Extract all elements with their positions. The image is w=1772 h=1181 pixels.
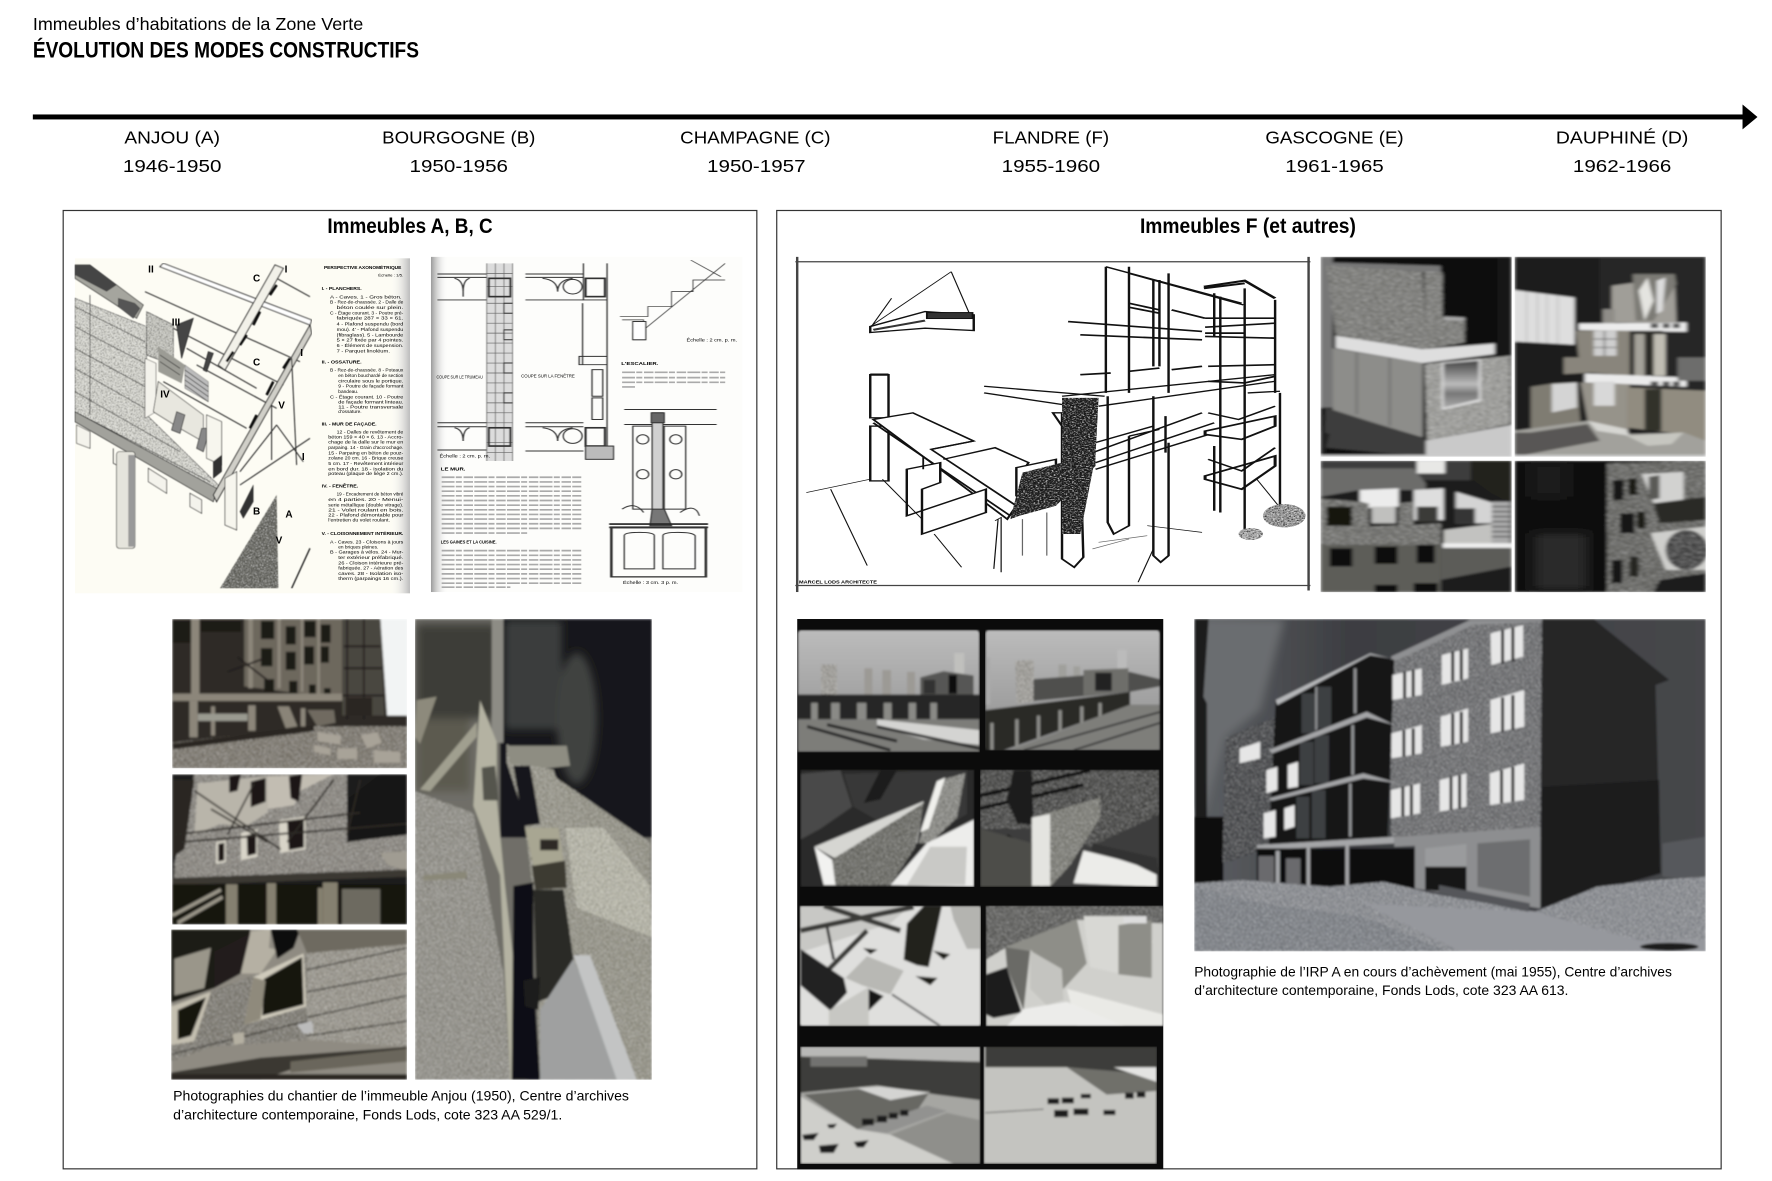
caption: IRP A: d’architecture contemporaine, Fonds Lods, cote 323 AA 613. — [1194, 982, 1568, 998]
timeline labels: DAUPHINÉ (D) — [1556, 127, 1688, 147]
plate: perspective axonométrique: 11 - Poutre transversale — [338, 404, 404, 409]
plate: coupes et détails: LE MUR. — [441, 467, 466, 472]
plate: perspective axonométrique: de façade formant linteau. — [338, 400, 403, 405]
frame 5 — [800, 906, 981, 1026]
photo: maquette, angle — [1320, 256, 1512, 457]
plate: perspective axonométrique: B - Rez-de-chaussée. 8 - Poteaux — [330, 368, 404, 373]
plate: coupes et détails: COUPE SUR LA FENÊTRE — [521, 372, 575, 379]
caption: chantier Anjou: d’architecture contemporaine, Fonds Lods, cote 323 AA 529/1. — [173, 1107, 562, 1123]
plate: perspective axonométrique: fabriquée 287 × 33 × 61. — [337, 316, 403, 321]
plate: perspective axonométrique: III. - MUR DE FAÇADE. — [322, 422, 377, 427]
plate: perspective axonométrique: C - Étage courant. 10 - Poutre — [330, 394, 404, 399]
plate: perspective axonométrique: béton coulée sur plein. — [337, 305, 403, 310]
frame 6 — [986, 906, 1163, 1026]
plate: perspective axonométrique: II. - OSSATURE. — [322, 359, 362, 364]
plate: perspective axonométrique: béton 159 × 40 × 6. 13 - Accro- — [328, 434, 404, 439]
timeline labels: 1950-1957 — [707, 156, 806, 176]
plate: perspective axonométrique: 21 - Volet roulant en bois. — [328, 508, 403, 513]
photo: maquette avec visiteurs — [1320, 460, 1512, 592]
plate: perspective axonométrique: I. - PLANCHERS. — [322, 286, 362, 291]
plate: perspective axonométrique: poteau (plaque de liège 2 cm.). — [328, 471, 403, 476]
photo: tranchée et murs préfabriqués — [415, 619, 652, 1080]
plate: perspective axonométrique: C - Étage courant. 3 - Poutre pré- — [330, 310, 404, 315]
frame 2 — [985, 630, 1160, 750]
panel: immeubles F — [777, 210, 1721, 1169]
plate: perspective axonométrique: 7 - Parquet linoléum. — [337, 348, 390, 353]
timeline labels: BOURGOGNE (B) — [382, 127, 535, 147]
plate: perspective axonométrique: parpaing. 14 - Grain d'accrochage. — [328, 445, 403, 450]
plate: coupes et détails: LES GAINES ET LA CUISINE. — [441, 540, 497, 545]
plate: perspective axonométrique: A - Caves. 23 - Cloisons à jours — [330, 540, 403, 545]
plate: perspective axonométrique: B - Rez-de-chaussée. 2 - Dalle de — [330, 300, 404, 305]
title: ÉVOLUTION DES MODES CONSTRUCTIFS — [33, 38, 419, 63]
timeline labels: FLANDRE (F) — [993, 127, 1109, 147]
plate: perspective axonométrique: en bord dur. 18 - Isolation du — [328, 466, 404, 471]
plate: perspective axonométrique: 5 cm. 17 - Revêtement intérieur — [328, 461, 404, 466]
heading: immeubles F: Immeubles F (et autres) — [1140, 215, 1356, 238]
caption: IRP A: Photographie de l’IRP A en cours d’achèvement (mai 1955), Centre d’archives — [1194, 963, 1672, 979]
caption: chantier Anjou: Photographies du chantier de l’immeuble Anjou (1950), Centre d’archives — [173, 1088, 629, 1104]
photo: maquette, structure — [1514, 256, 1706, 457]
plate: perspective axonométrique: I — [285, 264, 288, 275]
plate: perspective axonométrique: V — [278, 400, 285, 411]
plate: perspective axonométrique: en briques pleines. — [338, 544, 378, 549]
frame 8 — [984, 1047, 1157, 1164]
plate: coupes et détails: L'ESCALIER. — [621, 362, 659, 367]
plate: perspective axonométrique: (fibraglass). 5 - Lambourde — [337, 332, 404, 337]
photo: IRP A en cours d'achèvement — [1194, 619, 1706, 952]
timeline labels: 1961-1965 — [1285, 156, 1384, 176]
frame 1 — [798, 630, 980, 752]
timeline labels: 1946-1950 — [123, 156, 221, 176]
frame 4 — [980, 770, 1159, 887]
plate: perspective axonométrique: 26 - Cloison intérieure pré- — [338, 560, 404, 565]
title: Immeubles d’habitations de la Zone Verte — [33, 14, 363, 34]
photo: chantier, vue d'ensemble — [172, 619, 407, 768]
plate: perspective axonométrique: C — [253, 274, 260, 285]
plate: perspective axonométrique: bandeau. — [338, 389, 358, 394]
photo: planche-contact de chantier — [797, 619, 1164, 1170]
timeline labels: CHAMPAGNE (C) — [680, 127, 830, 147]
plate: perspective axonométrique: 19 - Encadrement de béton vibré — [337, 492, 404, 497]
plate: perspective axonométrique: 5 × 27 fixée par 4 pointes. — [337, 338, 403, 343]
panel: immeubles A, B, C — [63, 210, 757, 1169]
plate: perspective axonométrique: therm (parpaings 16 cm.). — [338, 576, 403, 581]
plate: perspective axonométrique: II — [148, 264, 154, 275]
frame 7 — [800, 1047, 980, 1164]
plate: coupes et détails: Échelle : 2 cm. p. m. — [440, 453, 490, 459]
plate: perspective axonométrique: 22 - Plafond démontable pour — [328, 512, 404, 517]
plate: perspective axonométrique: V — [276, 536, 283, 547]
plate: perspective axonométrique: serie métallique (double vitrage). — [328, 502, 403, 507]
drawing: perspective Marcel Lods — [795, 256, 1310, 592]
plate: perspective axonométrique: V. - CLOISONNEMENT INTÉRIEUR. — [322, 531, 403, 536]
plate: perspective axonométrique: mou). 4' - Plafond suspendu — [337, 327, 404, 332]
caption: IRP A — [1194, 963, 1672, 998]
plate: perspective axonométrique: ter extérieur préfabriqué. — [338, 555, 403, 560]
heading: immeubles A, B, C: Immeubles A, B, C — [327, 215, 493, 238]
plate: perspective axonométrique: I — [300, 348, 303, 359]
plate: perspective axonométrique: 6 - Élément de suspension. — [337, 343, 403, 348]
photo: chantier, façade et étais — [172, 774, 407, 924]
plate: perspective axonométrique: 12 - Dalles de revêtement de — [337, 429, 404, 434]
timeline labels: 1962-1966 — [1573, 156, 1671, 176]
plate: perspective axonométrique: zolane 20 cm. 16 - Brique creuse — [328, 456, 404, 461]
drawing: perspective Marcel Lods: MARCEL LODS ARCHITECTE — [799, 579, 877, 585]
plate: perspective axonométrique: en béton bouchardé de section — [338, 373, 404, 378]
frame 3 — [800, 770, 974, 887]
plate: perspective axonométrique: A — [285, 510, 293, 521]
plate: coupes et détails: Échelle : 2 cm. p. m. — [687, 337, 737, 343]
photo: façade en contre-plongée — [1514, 460, 1706, 592]
plate: perspective axonométrique: III — [172, 318, 180, 329]
plate: coupes et détails: COUPE SUR LE TRUMEAU — [436, 375, 483, 380]
plate: perspective axonométrique: 15 - Parpaing en béton de pouz- — [328, 450, 404, 455]
plate: perspective axonométrique: B - Garages à vélos. 24 - Mur- — [330, 550, 404, 555]
plate: perspective axonométrique: fabriquée. 27 - Aération des — [338, 566, 403, 571]
plate: perspective axonométrique: 9 - Poutre de façade formant — [338, 384, 404, 389]
plate: coupes et détails — [431, 256, 737, 592]
plate: perspective axonométrique: C — [253, 358, 260, 369]
plate: coupes et détails: Échelle : 3 cm. 3 p. m. — [623, 580, 678, 586]
plate: perspective axonométrique: A - Caves. 1 - Gros béton. — [330, 294, 402, 299]
timeline labels: GASCOGNE (E) — [1265, 127, 1404, 147]
photo: chantier, panneaux de façade — [171, 930, 407, 1080]
timeline labels: ANJOU (A) — [124, 127, 220, 147]
plate: perspective axonométrique: 4 - Plafond suspendu (bord — [337, 322, 404, 327]
plate: perspective axonométrique: IV — [160, 390, 170, 401]
plate: perspective axonométrique: en 4 parties. 20 - Menui- — [328, 497, 404, 502]
plate: perspective axonométrique: PERSPECTIVE AXONOMÉTRIQUE — [324, 265, 401, 270]
title — [33, 14, 419, 63]
plate: perspective axonométrique — [74, 258, 410, 594]
plate: perspective axonométrique: circulaire sous le portique. — [338, 378, 403, 383]
plate: perspective axonométrique: l'entretien du volet roulant. — [328, 518, 390, 523]
plate: perspective axonométrique: IV. - FENÊTRE. — [322, 484, 358, 489]
plate: perspective axonométrique: Échelle : 1/5. — [378, 272, 403, 277]
plate: perspective axonométrique: caves. 28 - Isolation iso- — [338, 571, 404, 576]
timeline labels — [123, 127, 1688, 176]
plate: perspective axonométrique: B — [253, 506, 260, 517]
timeline labels: 1955-1960 — [1002, 156, 1100, 176]
arrow: timeline — [33, 105, 1757, 129]
caption: chantier Anjou — [173, 1088, 629, 1123]
timeline labels: 1950-1956 — [410, 156, 508, 176]
plate: perspective axonométrique: chage de la dalle sur le mur en — [328, 440, 404, 445]
plate: perspective axonométrique: d'ossature. — [338, 409, 362, 414]
plate: perspective axonométrique: I — [302, 452, 305, 463]
